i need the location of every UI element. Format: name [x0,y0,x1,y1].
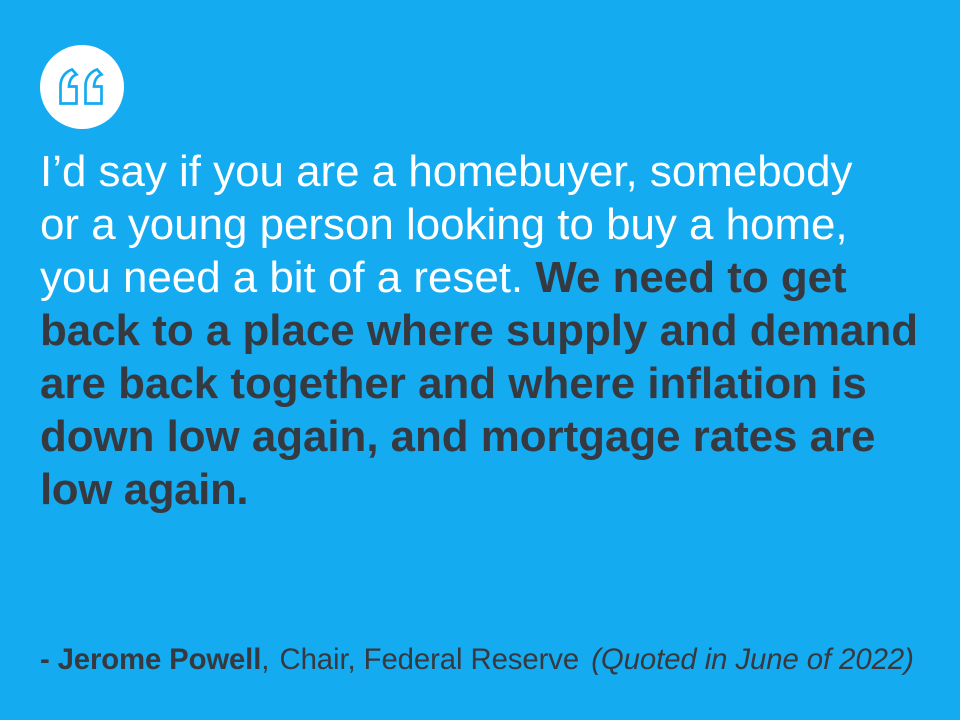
quote text: down low again, and mortgage rates are [40,412,875,461]
attribution: - Jerome Powell, Chair, Federal Reserve (Quoted in June of 2022) [40,643,914,676]
quote text: back to a place where supply and demand [40,306,918,355]
quote text: low again. [40,465,248,514]
quote text: or a young person looking to buy a home, [40,200,848,249]
quote text: I’d say if you are a homebuyer, somebody [40,147,852,196]
quote text [40,147,918,514]
quote text: are back together and where inflation is [40,359,867,408]
icon: quotation mark badge [40,45,124,129]
quote text: you need a bit of a reset. We need to get [40,253,847,302]
